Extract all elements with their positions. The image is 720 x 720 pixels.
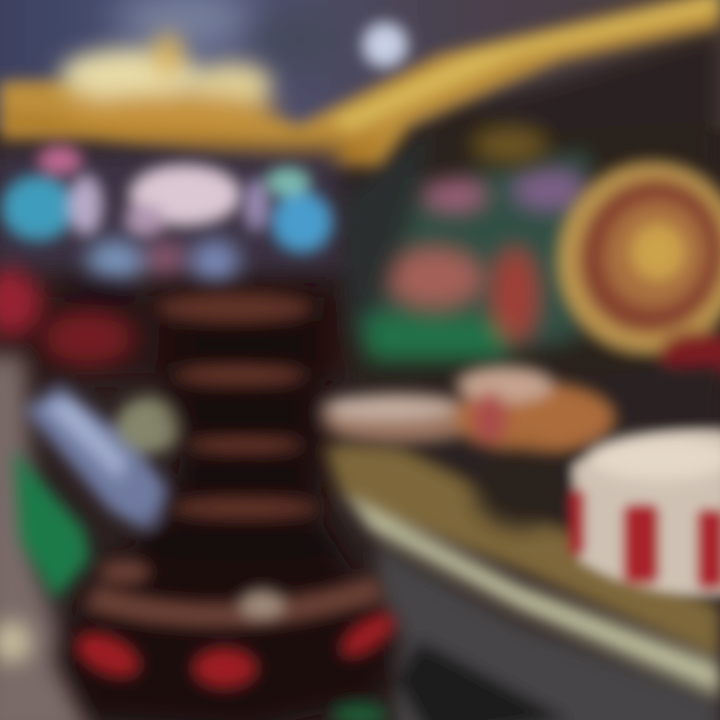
floor green bottom	[332, 703, 388, 720]
chip red stripes	[570, 490, 720, 588]
hand	[315, 367, 615, 454]
green table side	[14, 450, 90, 600]
red chip accents	[70, 605, 402, 688]
sign: white centre	[125, 165, 240, 236]
sign: lower glow	[87, 240, 239, 284]
neon signs band	[0, 146, 340, 284]
painting on wall	[360, 127, 590, 360]
roulette wheel	[531, 136, 720, 380]
floor left	[0, 355, 95, 720]
lower chip layers	[85, 560, 385, 628]
blue white table	[25, 385, 184, 540]
table surface right	[320, 365, 720, 720]
painting sign	[472, 127, 548, 163]
dark chip gaps	[145, 335, 335, 557]
sign: blue left	[2, 146, 102, 240]
ceiling light	[363, 23, 407, 67]
dark gap under hand	[475, 452, 565, 528]
gold ceiling band	[0, 0, 720, 168]
dark band with red machines	[0, 268, 340, 380]
chip layers	[157, 292, 319, 520]
central chip stack	[55, 290, 402, 720]
stack of white and red chips	[570, 429, 720, 596]
ceiling	[0, 0, 720, 130]
back wall: dark right side	[335, 30, 720, 390]
gold arch crown	[60, 33, 280, 130]
sign: cyan right	[244, 168, 332, 252]
